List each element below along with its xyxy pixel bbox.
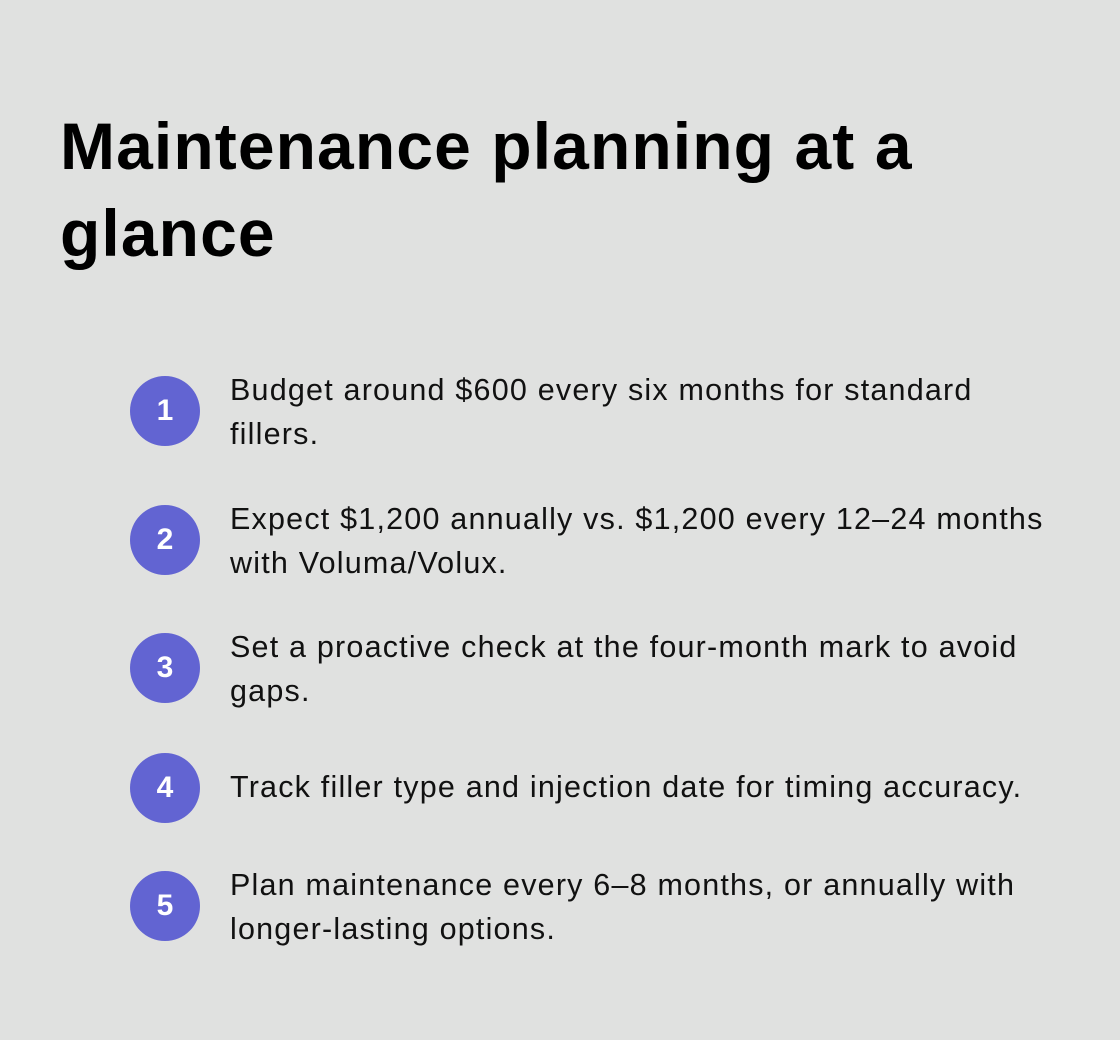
badge 5: 5: [157, 889, 173, 922]
title: Maintenance planning at a glance: [60, 109, 913, 270]
badge 2: [130, 505, 200, 575]
item 4: [130, 753, 1022, 823]
item 4: Track filler type and injection date for timing accuracy.: [230, 770, 1022, 804]
badge 5: [130, 871, 200, 941]
item 3: Set a proactive check at the four-month mark to avoid gaps.: [230, 630, 1017, 708]
badge 4: 4: [157, 771, 173, 804]
badge 2: 2: [157, 523, 173, 556]
item 5: Plan maintenance every 6–8 months, or annually with longer-lasting options.: [230, 868, 1015, 946]
badge 3: 3: [157, 651, 173, 684]
badge 3: [130, 633, 200, 703]
item 2: Expect $1,200 annually vs. $1,200 every 12–24 months with Voluma/Volux.: [230, 502, 1044, 580]
badge 1: [130, 376, 200, 446]
item 1: Budget around $600 every six months for standard fillers.: [230, 373, 973, 451]
badge 4: [130, 753, 200, 823]
badge 1: 1: [157, 394, 173, 427]
